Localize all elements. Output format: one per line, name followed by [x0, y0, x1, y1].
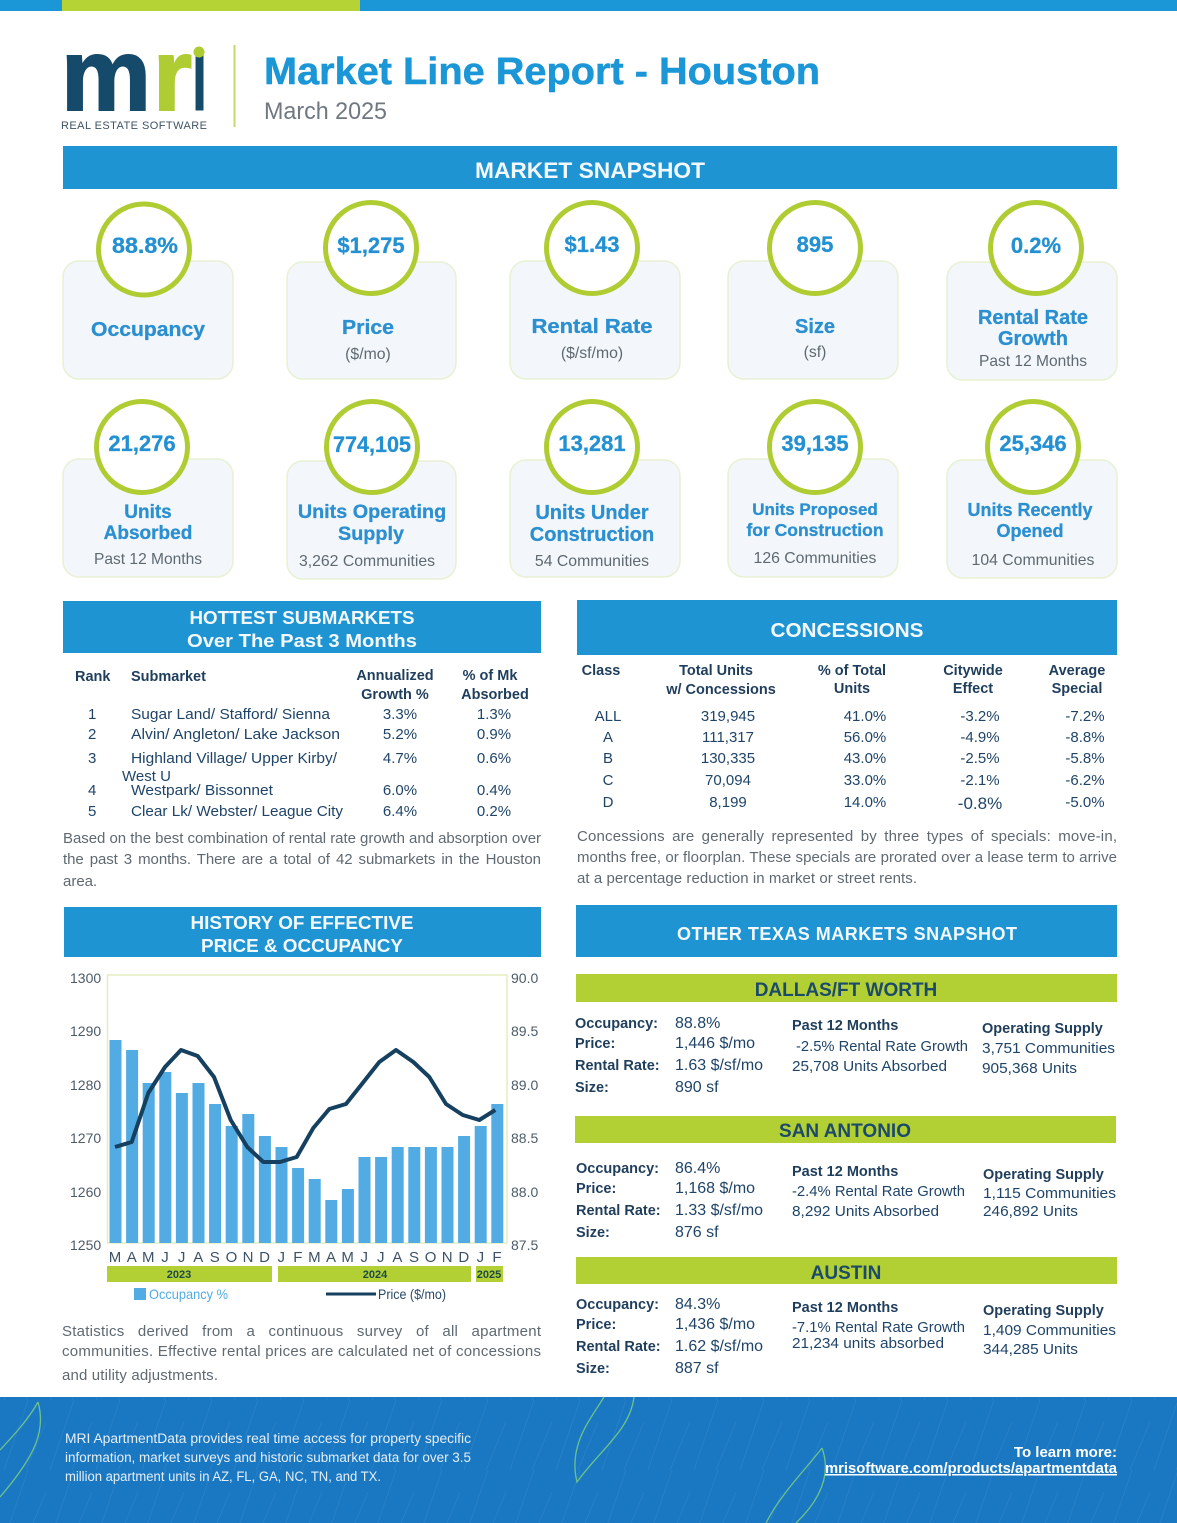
card: units operating supply: Units Operating	[298, 501, 446, 523]
card: units recently opened	[947, 402, 1117, 578]
card: units absorbed: 21,276	[108, 431, 176, 456]
table: hottest submarkets: 0.9%	[477, 726, 511, 743]
month labels: N	[442, 1249, 453, 1266]
table: hottest submarkets: Rank	[75, 669, 111, 685]
card: size: 895	[797, 232, 833, 257]
table: hottest submarkets: Westpark/ Bissonnet	[131, 782, 274, 799]
card: units operating supply	[287, 402, 456, 579]
market: dallas: Size:	[575, 1080, 609, 1096]
month labels: D	[259, 1249, 270, 1266]
banner: market snapshot: MARKET SNAPSHOT	[475, 158, 706, 183]
table: hottest submarkets: Absorbed	[461, 687, 529, 703]
table: concessions: -7.2%	[1065, 708, 1105, 725]
card: rental rate growth	[947, 202, 1117, 380]
leaf outlines	[0, 1397, 825, 1523]
table: concessions: Class	[582, 663, 620, 679]
table: concessions: Effect	[953, 681, 993, 697]
table: concessions: -5.8%	[1065, 750, 1105, 767]
market: dallas: Rental Rate:	[575, 1058, 660, 1074]
note: statistics: Statistics derived from a continuous survey of all apartment	[62, 1323, 542, 1340]
right axis: 88.0	[511, 1184, 538, 1200]
card: units under construction: Units Under	[535, 502, 649, 524]
market: austin: 344,285 Units	[983, 1341, 1078, 1358]
right axis: 89.5	[511, 1023, 538, 1039]
table: concessions: Special	[1052, 681, 1102, 697]
left axis: 1300	[70, 970, 101, 986]
card: units absorbed: Absorbed	[104, 523, 192, 544]
note: hottest submarkets: Based on the best combination of rental rate growth and absorption over	[63, 830, 541, 847]
card: rental rate: Rental Rate	[532, 316, 652, 338]
market: san antonio: 86.4%	[675, 1160, 720, 1177]
table: concessions: 111,317	[702, 729, 754, 746]
market: austin: AUSTIN	[811, 1263, 881, 1284]
table: hottest submarkets: 0.6%	[477, 750, 511, 767]
card: units proposed	[728, 402, 898, 577]
footer call to action: To learn more:	[1014, 1444, 1117, 1461]
table: concessions: Total Units	[679, 663, 753, 679]
market: san antonio: 8,292 Units Absorbed	[792, 1203, 939, 1220]
market: san antonio: 246,892 Units	[983, 1203, 1078, 1220]
note: concessions: at a percentage reduction in market or street rents.	[577, 870, 917, 887]
table: concessions: 41.0%	[844, 708, 886, 725]
right axis: 90.0	[511, 970, 538, 986]
table: hottest submarkets: 3.3%	[383, 706, 417, 723]
table: concessions: A	[603, 729, 613, 746]
month labels: S	[210, 1249, 220, 1266]
table: concessions: -3.2%	[960, 708, 1000, 725]
market: austin: Past 12 Months	[792, 1300, 898, 1316]
card: units operating supply: 774,105	[333, 432, 411, 457]
title: Market Line Report - Houston	[264, 51, 820, 93]
table: concessions	[582, 663, 1105, 813]
table: concessions: Citywide	[943, 663, 1003, 679]
table: concessions: -2.1%	[960, 772, 1000, 789]
chart: price and occupancy history	[70, 970, 538, 1302]
note: concessions: Concessions are generally represented by three types of specials: move-in,	[577, 828, 1117, 845]
card: size: (sf)	[804, 344, 826, 361]
market: dallas: 890 sf	[675, 1079, 719, 1096]
market: dallas	[575, 974, 1117, 1096]
market: san antonio: -2.4% Rental Rate Growth	[792, 1183, 965, 1200]
card: price: $1,275	[337, 233, 405, 258]
card: rental rate growth: Rental Rate	[978, 307, 1088, 329]
table: hottest submarkets: 1.3%	[477, 706, 511, 723]
card: rental rate: $1.43	[564, 232, 620, 257]
table: concessions: Units	[834, 681, 870, 697]
card: units absorbed: Units	[124, 502, 172, 523]
card: size	[728, 202, 898, 379]
card: rental rate growth: 0.2%	[1011, 233, 1061, 258]
card: rental rate growth: Past 12 Months	[979, 353, 1087, 370]
month labels: J	[161, 1249, 169, 1266]
table: hottest submarkets: 4.7%	[383, 750, 417, 767]
month labels: A	[326, 1249, 336, 1266]
table: concessions: -2.5%	[960, 750, 1000, 767]
right axis: 87.5	[511, 1237, 538, 1253]
market: dallas: 3,751 Communities	[982, 1040, 1115, 1057]
left axis: 1250	[70, 1237, 101, 1253]
price line	[115, 1050, 495, 1162]
month labels: A	[193, 1249, 203, 1266]
market: austin: Price:	[576, 1317, 616, 1333]
market: dallas: 88.8%	[675, 1015, 720, 1032]
occupancy bars	[110, 1040, 503, 1243]
top accent bar	[0, 0, 1177, 11]
table: hottest submarkets: 0.2%	[477, 803, 511, 820]
card: occupancy: Occupancy	[91, 319, 206, 341]
month labels: J	[360, 1249, 368, 1266]
market: dallas: 1,446 $/mo	[675, 1035, 755, 1052]
right axis: 89.0	[511, 1077, 538, 1093]
note: hottest submarkets: the past 3 months. There are a total of 42 submarkets in the Houston	[63, 851, 541, 868]
market: dallas: Price:	[575, 1036, 615, 1052]
banner: concessions: CONCESSIONS	[770, 620, 924, 642]
card: units proposed: 126 Communities	[754, 550, 877, 567]
market: austin: 1,409 Communities	[983, 1322, 1116, 1339]
table: hottest submarkets: 0.4%	[477, 782, 511, 799]
table: concessions: 56.0%	[844, 729, 886, 746]
table: hottest submarkets: 6.4%	[383, 803, 417, 820]
left axis: 1270	[70, 1130, 101, 1146]
right axis	[511, 970, 538, 1253]
market: dallas: -2.5% Rental Rate Growth	[796, 1038, 968, 1055]
footer description: million apartment units in AZ, FL, GA, NC, TN, and TX.	[65, 1469, 381, 1484]
month labels: M	[308, 1249, 321, 1266]
year labels: 2025	[477, 1269, 501, 1281]
banner: hottest submarkets: HOTTEST SUBMARKETS	[190, 608, 414, 628]
year labels: 2023	[167, 1269, 191, 1281]
banner: hottest submarkets	[63, 601, 541, 653]
left axis	[70, 970, 101, 1253]
month labels: A	[392, 1249, 402, 1266]
market: austin: Rental Rate:	[576, 1339, 661, 1355]
banner: history: PRICE & OCCUPANCY	[201, 936, 403, 956]
table: concessions: w/ Concessions	[665, 682, 776, 698]
table: concessions: C	[603, 772, 614, 789]
logo: r	[153, 18, 192, 132]
month labels	[109, 1249, 502, 1266]
table: hottest submarkets: Growth %	[361, 687, 429, 703]
table: hottest submarkets: Submarket	[131, 669, 206, 685]
market: austin: 84.3%	[675, 1296, 720, 1313]
card: price: Price	[342, 317, 394, 339]
table: hottest submarkets: Clear Lk/ Webster/ League City	[131, 803, 344, 820]
table: concessions: 8,199	[709, 794, 747, 811]
month labels: M	[341, 1249, 354, 1266]
footer call to action	[825, 1444, 1118, 1477]
market: austin: 887 sf	[675, 1360, 719, 1377]
banner: history: HISTORY OF EFFECTIVE	[190, 913, 414, 933]
date: March 2025	[264, 98, 387, 125]
table: concessions: 14.0%	[844, 794, 886, 811]
card: units recently opened: Units Recently	[967, 500, 1093, 520]
market: austin: 21,234 units absorbed	[792, 1335, 944, 1352]
table: hottest submarkets: Alvin/ Angleton/ Lake Jackson	[131, 726, 340, 743]
market: san antonio: Size:	[576, 1225, 610, 1241]
table: hottest submarkets: 5	[88, 803, 96, 820]
market: austin: Occupancy:	[576, 1297, 659, 1313]
month labels: J	[178, 1249, 185, 1266]
card: units absorbed	[63, 402, 233, 577]
table: hottest submarkets: Sugar Land/ Stafford/ Sienna	[131, 706, 331, 723]
month labels: J	[277, 1249, 285, 1266]
footer description: MRI ApartmentData provides real time access for property specific	[65, 1431, 471, 1446]
table: concessions: 33.0%	[844, 772, 886, 789]
table: hottest submarkets: 5.2%	[383, 726, 417, 743]
market: dallas: Past 12 Months	[792, 1018, 898, 1034]
market: dallas: 1.63 $/sf/mo	[675, 1057, 763, 1074]
table: concessions: B	[603, 750, 613, 767]
month labels: O	[425, 1249, 436, 1266]
card: units proposed: Units Proposed	[752, 500, 878, 519]
table: concessions: 43.0%	[844, 750, 886, 767]
table: concessions: 319,945	[701, 708, 755, 725]
market: austin: -7.1% Rental Rate Growth	[792, 1319, 965, 1336]
table: hottest submarkets: 1	[88, 706, 96, 723]
month labels: N	[243, 1249, 253, 1266]
month labels: A	[127, 1249, 137, 1266]
logo	[61, 18, 207, 132]
footer call to action: mrisoftware.com/products/apartmentdata	[825, 1460, 1118, 1477]
market: dallas: 25,708 Units Absorbed	[792, 1058, 947, 1075]
card: size: Size	[795, 316, 835, 338]
year labels	[107, 1266, 503, 1282]
card: units absorbed: Past 12 Months	[94, 551, 202, 568]
market: dallas: 905,368 Units	[982, 1060, 1077, 1077]
market: san antonio: Price:	[576, 1181, 616, 1197]
card: occupancy	[63, 204, 233, 379]
card: units under construction	[510, 402, 680, 577]
table: hottest submarkets: Annualized	[356, 668, 434, 684]
table: hottest submarkets: 4	[88, 782, 96, 799]
note: statistics: communities. Effective rental prices are calculated net of concessions	[62, 1343, 541, 1360]
market: austin: Operating Supply	[983, 1303, 1104, 1319]
month labels: M	[142, 1249, 155, 1266]
card: units proposed: for Construction	[746, 520, 884, 540]
market: san antonio	[575, 1116, 1116, 1241]
note: concessions	[577, 828, 1117, 887]
month labels: J	[377, 1249, 385, 1266]
market: austin: 1,436 $/mo	[675, 1316, 755, 1333]
legend	[134, 1286, 446, 1302]
year labels: 2024	[363, 1269, 388, 1281]
logo: REAL ESTATE SOFTWARE	[61, 120, 207, 132]
market: san antonio: 1.33 $/sf/mo	[675, 1202, 763, 1219]
table: concessions: -8.8%	[1065, 729, 1105, 746]
month labels: J	[477, 1249, 484, 1266]
note: statistics: and utility adjustments.	[62, 1367, 218, 1384]
note: concessions: months free, or floorplan. These specials are prorated over a lease term to arrive	[577, 849, 1117, 866]
table: concessions: 130,335	[701, 750, 755, 767]
month labels: M	[109, 1249, 121, 1266]
market: san antonio: 1,115 Communities	[983, 1185, 1116, 1202]
table: hottest submarkets: 6.0%	[383, 782, 417, 799]
right axis: 88.5	[511, 1130, 538, 1146]
card: price: ($/mo)	[345, 346, 391, 363]
banner: market snapshot	[63, 146, 1117, 189]
footer description: information, market surveys and historic submarket data for over 3.5	[65, 1450, 471, 1465]
month labels: F	[492, 1249, 502, 1266]
card: occupancy: 88.8%	[112, 233, 178, 258]
market: san antonio: SAN ANTONIO	[779, 1121, 911, 1142]
month labels: F	[293, 1249, 302, 1266]
banner: concessions	[577, 600, 1117, 655]
table: hottest submarkets: 2	[88, 726, 96, 743]
table: concessions: D	[603, 794, 614, 811]
card: units operating supply: 3,262 Communities	[299, 553, 435, 570]
month labels: D	[458, 1249, 469, 1266]
card: units proposed: 39,135	[781, 431, 849, 456]
note: hottest submarkets	[63, 830, 541, 890]
card: price	[287, 202, 456, 379]
banner: hottest submarkets: Over The Past 3 Months	[187, 631, 417, 651]
table: concessions: Average	[1049, 663, 1105, 679]
table: hottest submarkets: West U	[122, 768, 171, 785]
note: hottest submarkets: area.	[63, 873, 97, 890]
card: rental rate growth: Growth	[998, 328, 1068, 350]
banner: other texas markets: OTHER TEXAS MARKETS SNAPSHOT	[677, 924, 1017, 944]
note: statistics	[62, 1323, 542, 1384]
market: austin: 1.62 $/sf/mo	[675, 1338, 763, 1355]
legend: Price ($/mo)	[378, 1286, 446, 1302]
footer description	[65, 1431, 471, 1484]
banner: history	[64, 907, 541, 957]
table: concessions: -5.0%	[1065, 794, 1105, 811]
card: units recently opened: 104 Communities	[972, 552, 1095, 569]
market: dallas: Occupancy:	[575, 1016, 658, 1032]
card: units operating supply: Supply	[338, 523, 404, 545]
table: hottest submarkets: 3	[88, 750, 96, 767]
market: austin: Size:	[576, 1361, 610, 1377]
banner: other texas markets	[576, 905, 1117, 957]
table: concessions: -4.9%	[960, 729, 1000, 746]
market: san antonio: Occupancy:	[576, 1161, 659, 1177]
market: dallas: Operating Supply	[982, 1021, 1103, 1037]
table: concessions: % of Total	[818, 663, 886, 679]
logo: m	[61, 18, 151, 132]
card: rental rate: ($/sf/mo)	[561, 345, 623, 362]
month labels: S	[409, 1249, 419, 1266]
table: concessions: ALL	[595, 708, 621, 725]
table: concessions: 70,094	[705, 772, 751, 789]
footer	[0, 1397, 1177, 1523]
card: units under construction: 13,281	[558, 431, 626, 456]
left axis: 1260	[70, 1184, 101, 1200]
month labels: O	[226, 1249, 237, 1266]
legend: Occupancy %	[149, 1286, 228, 1302]
market: austin	[576, 1257, 1117, 1377]
card: units under construction: Construction	[530, 524, 654, 546]
table: concessions: -0.8%	[958, 794, 1002, 813]
market: san antonio: Operating Supply	[983, 1167, 1104, 1183]
card: rental rate	[510, 202, 680, 379]
card: units recently opened: 25,346	[999, 431, 1067, 456]
table: hottest submarkets: Highland Village/ Upper Kirby/	[131, 750, 338, 767]
card: units recently opened: Opened	[996, 521, 1064, 541]
table: hottest submarkets: % of Mk	[463, 668, 518, 684]
market: san antonio: 1,168 $/mo	[675, 1180, 755, 1197]
left axis: 1280	[70, 1077, 101, 1093]
market: dallas: DALLAS/FT WORTH	[755, 980, 937, 1001]
card: units under construction: 54 Communities	[535, 553, 649, 570]
market: san antonio: Rental Rate:	[576, 1203, 661, 1219]
left axis: 1290	[70, 1023, 101, 1039]
market: san antonio: 876 sf	[675, 1224, 719, 1241]
table: concessions: -6.2%	[1065, 772, 1105, 789]
logo: ı	[192, 18, 207, 132]
market: san antonio: Past 12 Months	[792, 1164, 898, 1180]
table: hottest submarkets	[75, 668, 529, 820]
